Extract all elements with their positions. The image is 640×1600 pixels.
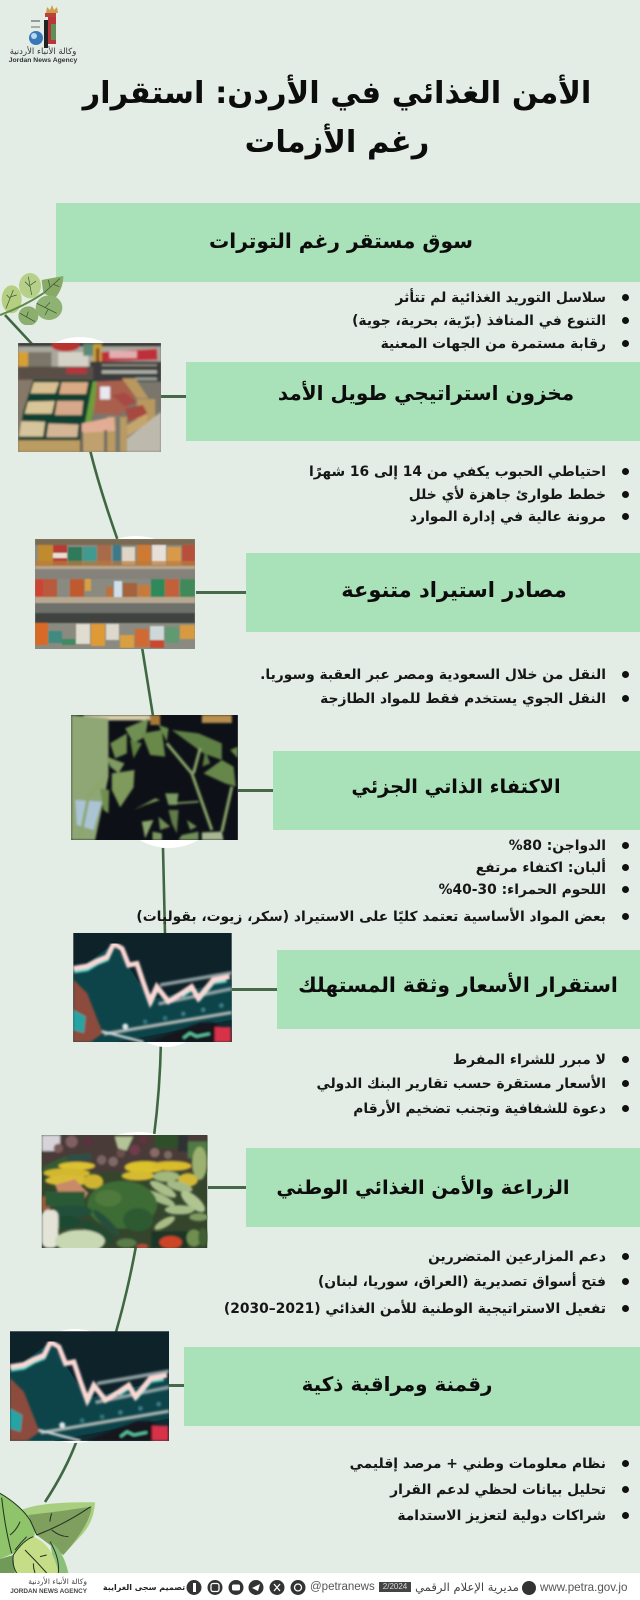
panel: strategic stock	[18, 337, 640, 525]
footer	[0, 1573, 640, 1600]
title: الأمن الغذائي في الأردن: استقرار	[83, 76, 591, 111]
footer department: مديرية الإعلام الرقمي	[415, 1580, 519, 1594]
photo: vegetables	[42, 1135, 208, 1248]
panel: prices and consumer trust	[73, 933, 640, 1117]
heading band: strategic stock: مخزون استراتيجي طويل الأمد	[278, 381, 574, 405]
photo: shipping containers	[35, 539, 195, 649]
connector	[169, 1384, 184, 1387]
logo Arabic name: وكالة الأنباء الأردنية	[10, 47, 76, 57]
bullet: no panic buying: لا مبرر للشراء المفرط	[453, 1052, 606, 1068]
connector	[238, 789, 273, 792]
heading band: partial self-sufficiency: الاكتفاء الذاتي الجزئي	[351, 775, 561, 798]
bullet: information system: نظام معلومات وطني + مرصد إقليمي	[350, 1456, 606, 1472]
panel: stable market	[56, 203, 640, 352]
bullet: transparency: دعوة للشفافية وتجنب تضخيم الأرقام	[353, 1101, 606, 1117]
heading band: prices and consumer trust	[277, 950, 640, 1029]
bullet: stable prices: الأسعار مستقرة حسب تقارير البنك الدولي	[316, 1076, 606, 1092]
heading band: agriculture and food security: الزراعة والأمن الغذائي الوطني	[276, 1176, 570, 1199]
panel: import sources	[35, 536, 640, 707]
heading band: strategic stock	[186, 362, 640, 441]
bullet: flexibility: مرونة عالية في إدارة الموارد	[410, 509, 606, 525]
heading band: agriculture and food security	[246, 1148, 640, 1227]
heading band: digitisation and smart monitoring	[184, 1347, 640, 1426]
heading band: prices and consumer trust: استقرار الأسعار وثقة المستهلك	[298, 973, 618, 997]
icon: bottom leaves	[0, 1492, 95, 1573]
footer agency name: وكالة الأنباء الأردنية	[28, 1577, 87, 1586]
footer web icon	[522, 1581, 536, 1595]
panel: digitisation and smart monitoring	[10, 1329, 640, 1524]
image decor circle	[76, 1132, 200, 1242]
photo: supermarket produce	[18, 343, 161, 452]
logo: Jordan News Agency	[8, 5, 78, 64]
connector	[208, 1186, 246, 1189]
photo: market chart	[73, 933, 232, 1042]
footer date tag	[379, 1582, 411, 1592]
title	[81, 74, 591, 160]
bullet: imports: بعض المواد الأساسية تعتمد كليًا على الاستيراد (سكر، زيوت، بقوليات)	[136, 909, 606, 925]
footer social icons	[186, 1580, 306, 1595]
footer agency name	[10, 1576, 87, 1595]
bullet: real-time analysis: تحليل بيانات لحظي لدعم القرار	[390, 1482, 606, 1498]
bullet: grain reserve: احتياطي الحبوب يكفي من 14 إلى 16 شهرًا	[309, 464, 606, 480]
bullet: emergency plans: خطط طوارئ جاهزة لأي خلل	[409, 487, 606, 503]
footer date tag: 2/2024	[383, 1582, 407, 1591]
connector	[196, 591, 246, 594]
logo emblem	[29, 5, 58, 48]
footer agency name: JORDAN NEWS AGENCY	[10, 1588, 87, 1595]
bullet: monitoring: رقابة مستمرة من الجهات المعنية	[381, 336, 606, 352]
title: رغم الأزمات	[245, 125, 429, 160]
image decor circle	[78, 536, 194, 644]
connector	[161, 395, 186, 398]
timeline connector	[4, 314, 166, 1503]
footer website: www.petra.gov.jo	[540, 1581, 627, 1594]
icon: top leaf sprig	[0, 273, 64, 325]
image decor circle	[25, 337, 135, 447]
image decor circle	[124, 963, 208, 1047]
heading band: import sources: مصادر استيراد متنوعة	[341, 578, 567, 602]
bullet: port diversity: التنوع في المنافذ (برّية، بحرية، جوية)	[352, 313, 606, 329]
bullet: partnerships: شراكات دولية لتعزيز الاستدامة	[397, 1508, 606, 1524]
image decor circle	[20, 1329, 130, 1443]
heading band: stable market: سوق مستقر رغم التوترات	[209, 229, 473, 253]
footer handle: @petranews	[310, 1581, 375, 1593]
heading band: import sources	[246, 553, 640, 632]
footer designer credit: تصميم سجى الغرايبة	[103, 1583, 185, 1592]
panel: partial self-sufficiency	[71, 715, 640, 925]
panel: agriculture and food security	[42, 1132, 640, 1317]
bullet: supply chains: سلاسل التوريد الغذائية لم تتأثر	[396, 290, 606, 306]
bullet: farmer support: دعم المزارعين المتضررين	[428, 1249, 606, 1265]
heading band: digitisation and smart monitoring: رقمنة ومراقبة ذكية	[302, 1373, 492, 1396]
heading band: partial self-sufficiency	[273, 751, 640, 830]
bullet: poultry: الدواجن: 80%	[509, 838, 606, 854]
photo: tomato plants	[71, 715, 238, 840]
bullet: national strategy: تفعيل الاستراتيجية الوطنية للأمن الغذائي (2021–2030)	[224, 1301, 606, 1317]
bullet: export markets: فتح أسواق تصديرية (العراق، سوريا، لبنان)	[318, 1274, 606, 1290]
bullet: transport routes: النقل من خلال السعودية ومصر عبر العقبة وسوريا.	[260, 667, 606, 683]
logo English name: Jordan News Agency	[9, 57, 77, 64]
photo: market chart	[10, 1331, 169, 1441]
image decor circle	[112, 735, 226, 848]
bullet: red meat: اللحوم الحمراء: 30-40%	[439, 882, 606, 898]
bullet: air transport: النقل الجوي يستخدم فقط للمواد الطازجة	[320, 691, 606, 707]
heading band: stable market	[56, 203, 640, 282]
connector	[232, 988, 277, 991]
bullet: dairy: ألبان: اكتفاء مرتفع	[476, 860, 606, 876]
